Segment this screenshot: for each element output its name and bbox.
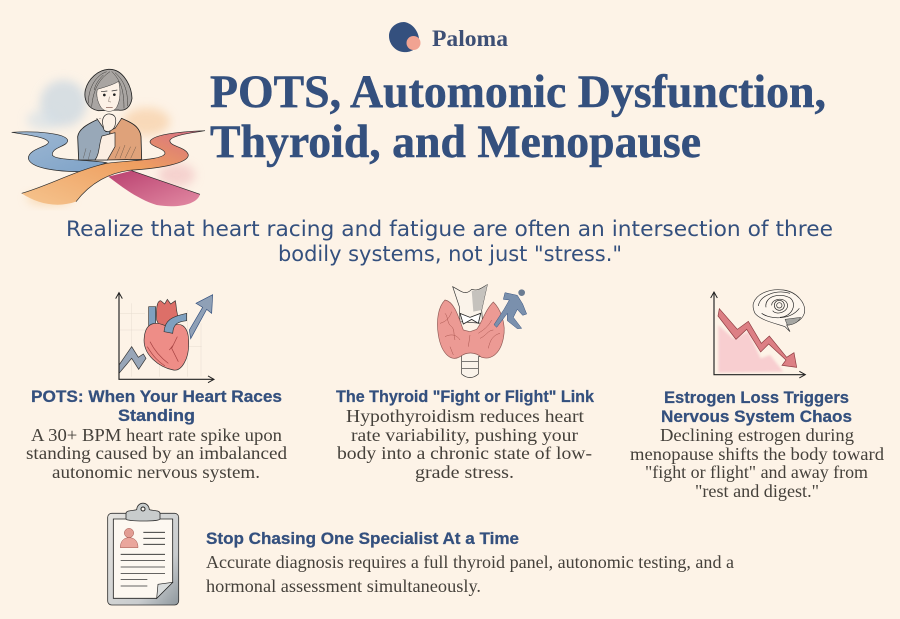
- logo: Paloma: Paloma: [432, 26, 509, 51]
- heading: Stop Chasing One Specialist At a Time: [206, 530, 519, 548]
- panel: POTS: [26, 293, 287, 482]
- text block: [630, 425, 884, 501]
- illustration: woman at crossing ribbons: [12, 69, 205, 206]
- heading: [31, 388, 282, 425]
- heading: The Thyroid "Fight or Flight" Link: [336, 388, 595, 406]
- title: [210, 66, 826, 168]
- panel: estrogen: [630, 290, 884, 501]
- text block: A 30+ BPM heart rate spike upon: [31, 425, 282, 445]
- text block: [337, 406, 592, 482]
- heading: POTS: When Your Heart Races: [31, 388, 282, 406]
- subtitle: [66, 217, 833, 266]
- heading: [661, 389, 852, 426]
- text block: Declining estrogen during: [660, 425, 854, 445]
- text block: rate variability, pushing your: [351, 425, 578, 445]
- icon: thyroid gland and runner: [437, 285, 527, 377]
- logo: Paloma: [389, 22, 509, 52]
- text block: [26, 425, 287, 482]
- text block: "rest and digest.": [695, 481, 819, 501]
- icon: heart on rising chart: [116, 293, 214, 383]
- sub-element: woman figure: [78, 69, 142, 160]
- text block: autonomic nervous system.: [52, 462, 260, 482]
- heading: Standing: [118, 407, 195, 425]
- panel: stop chasing: [108, 503, 734, 605]
- panel: thyroid: [336, 285, 595, 482]
- heading: Estrogen Loss Triggers: [664, 389, 849, 407]
- text block: hormonal assessment simultaneously.: [206, 576, 481, 596]
- text block: Accurate diagnosis requires a full thyroid panel, autonomic testing, and a: [206, 552, 734, 572]
- subtitle: bodily systems, not just "stress.": [278, 242, 622, 266]
- heading: Nervous System Chaos: [661, 408, 852, 426]
- title: POTS, Automonic Dysfunction,: [210, 66, 826, 118]
- text block: menopause shifts the body toward: [630, 444, 884, 464]
- text block: grade stress.: [415, 462, 514, 482]
- subtitle: Realize that heart racing and fatigue are often an intersection of three: [66, 217, 833, 241]
- text block: [206, 552, 734, 596]
- text block: body into a chronic state of low-: [337, 443, 592, 463]
- icon: declining chart and brain: [711, 290, 805, 378]
- text block: Hypothyroidism reduces heart: [346, 406, 584, 426]
- text block: standing caused by an imbalanced: [26, 443, 287, 463]
- icon: clipboard: [108, 503, 179, 605]
- text block: "fight or flight" and away from: [645, 462, 868, 482]
- title: Thyroid, and Menopause: [210, 116, 701, 168]
